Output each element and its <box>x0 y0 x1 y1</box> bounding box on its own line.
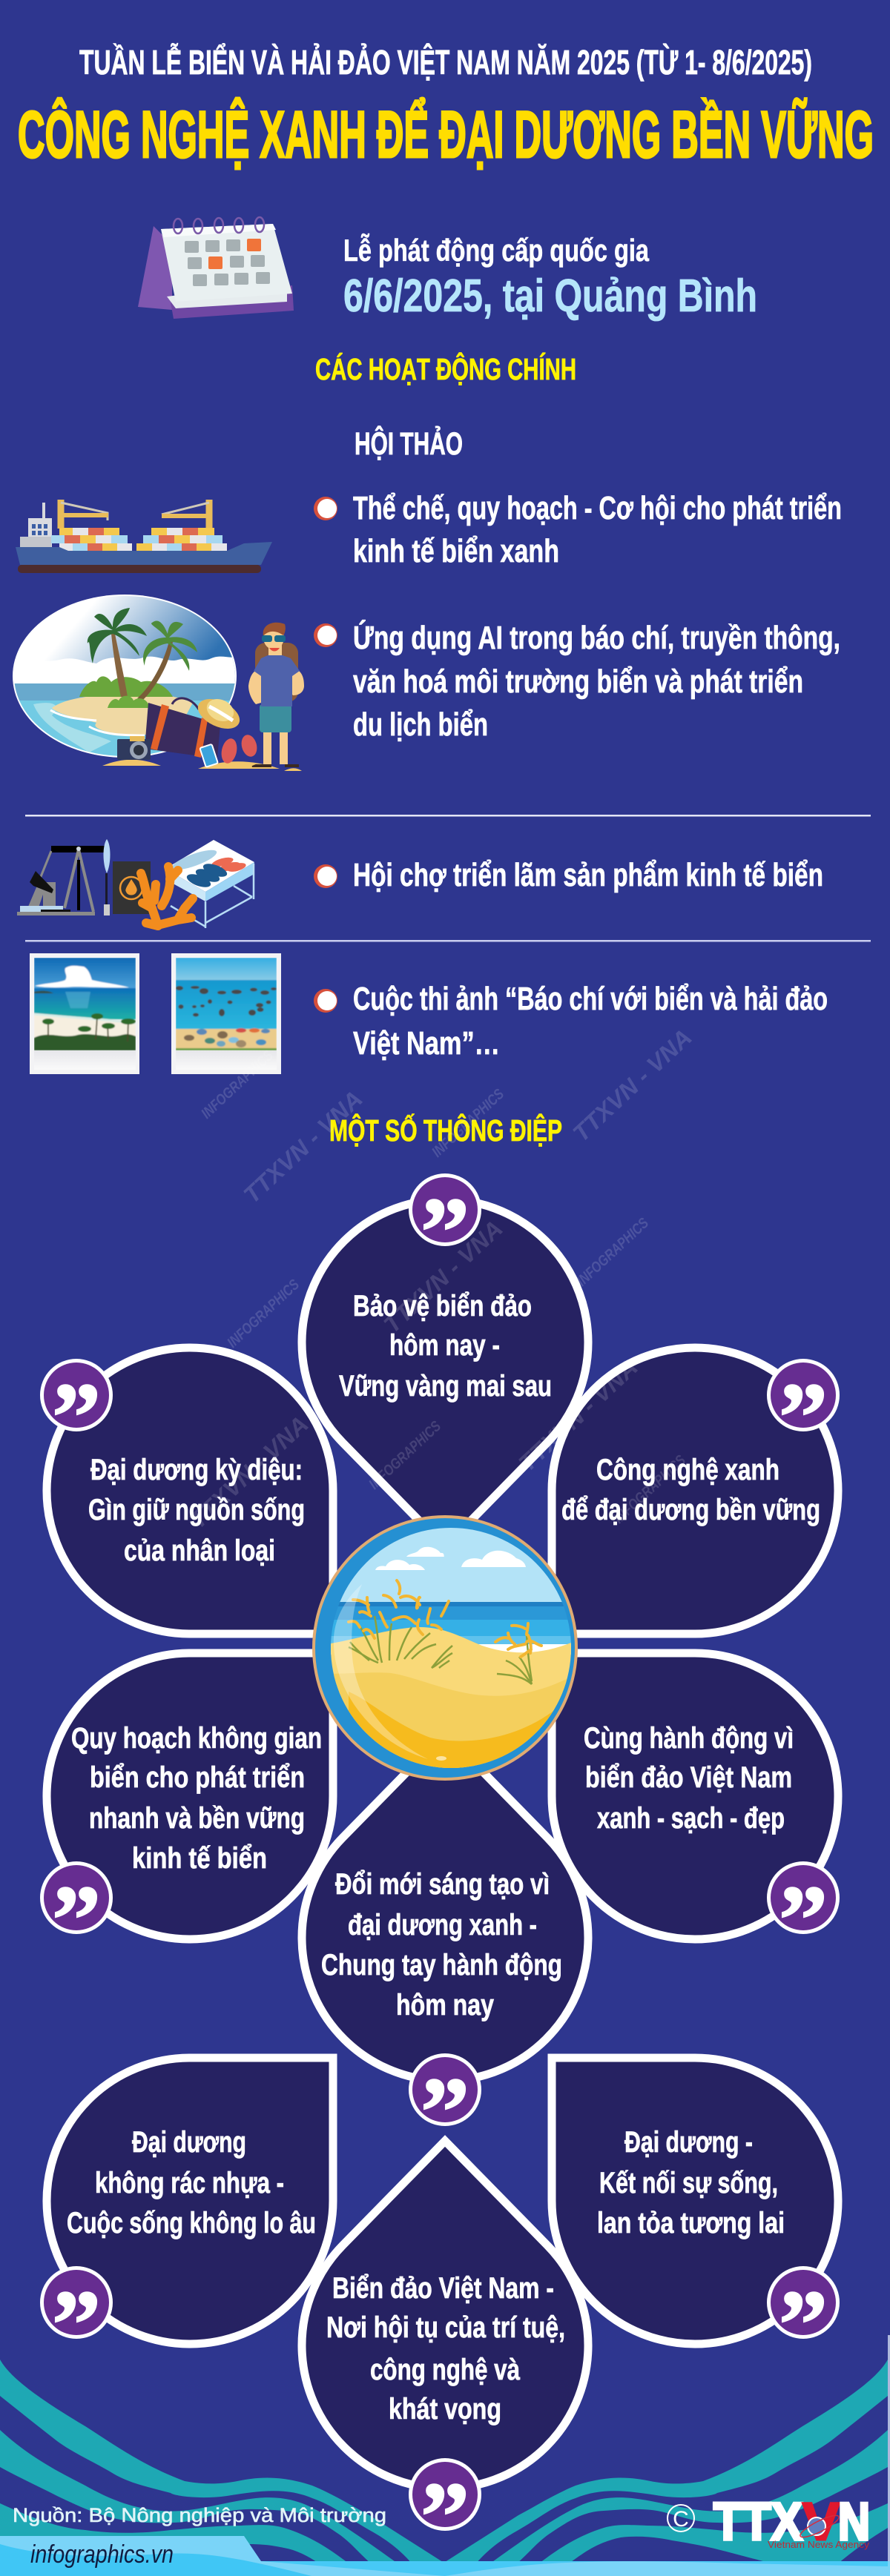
watermarks: INFOGRAPHICS <box>429 1086 507 1161</box>
petal: lower right: Đại dương - <box>624 2126 753 2159</box>
teardrop: top <box>302 1199 588 1547</box>
icon: island and traveller <box>13 595 304 771</box>
petal: middle left: nhanh và bền vững <box>89 1802 305 1835</box>
teardrop: bottom: khát vọng <box>389 2393 501 2426</box>
teardrop: centre <box>302 1733 588 2081</box>
icon: quote bottom: ” <box>421 2462 469 2571</box>
wave bands right <box>443 2360 888 2563</box>
teardrop: centre: Chung tay hành động <box>321 1949 562 1981</box>
petal: upper right <box>552 1348 838 1634</box>
fish stall <box>165 840 254 928</box>
launch label: Lễ phát động cấp quốc gia <box>343 232 649 268</box>
icon: quote middle right <box>767 1861 840 1974</box>
watermarks: INFOGRAPHICS <box>573 1215 652 1290</box>
logo: TTXVN: TTX <box>713 2493 802 2552</box>
petal: lower left <box>47 2058 333 2344</box>
sand mounds <box>102 760 302 771</box>
petal: middle right: biển đảo Việt Nam <box>585 1761 792 1794</box>
icon: quote lower right <box>767 2266 840 2379</box>
icon: quote top: ” <box>421 1177 469 1286</box>
grass stalks <box>349 1580 449 1638</box>
suitcase <box>145 698 220 758</box>
photo: beach <box>30 953 139 1074</box>
text: item 2: du lịch biển <box>353 706 488 743</box>
petal: middle right: xanh - sạch - đẹp <box>597 1802 785 1835</box>
traveller <box>248 623 304 766</box>
petal: upper left <box>47 1348 333 1634</box>
watermarks: INFOGRAPHICS <box>198 1047 277 1122</box>
icon: quote lower right: ” <box>779 2270 828 2379</box>
bullet <box>314 623 337 647</box>
teardrop: centre: hôm nay <box>396 1989 495 2022</box>
sand layers <box>326 1627 571 1772</box>
teardrop: bottom <box>302 2141 588 2489</box>
petal: lower left: Cuộc sống không lo âu <box>67 2207 316 2239</box>
photo: fishing boats <box>171 953 281 1074</box>
teardrop: centre: đại dương xanh - <box>348 1909 537 1941</box>
logo: TTXVN: N <box>838 2493 870 2552</box>
teardrop: top: Bảo vệ biển đảo <box>353 1290 532 1322</box>
petal: middle left: biển cho phát triển <box>90 1761 305 1794</box>
heading: messages: MỘT SỐ THÔNG ĐIỆP <box>329 1113 562 1148</box>
watermarks: TTXVN - VNA <box>378 1215 508 1338</box>
teardrop: top: Vững vàng mai sau <box>339 1370 552 1403</box>
watermarks: TTXVN - VNA <box>184 1411 314 1534</box>
petal: upper right: Công nghệ xanh <box>596 1454 779 1486</box>
icon: quote centre: ” <box>421 2057 469 2166</box>
launch event text <box>343 232 757 322</box>
camera <box>117 736 151 760</box>
bullet <box>314 989 337 1013</box>
flip-flops <box>220 733 260 765</box>
icon: quote lower left: ” <box>52 2270 101 2379</box>
watermarks <box>184 1024 697 1534</box>
petal: lower right: Kết nối sự sống, <box>599 2167 778 2199</box>
text: item 4: Việt Nam”… <box>353 1025 500 1062</box>
logo: TTXVN: V <box>802 2493 840 2552</box>
heading: main activities: CÁC HOẠT ĐỘNG CHÍNH <box>315 352 576 386</box>
illustration: beach lens <box>312 1515 578 1781</box>
petal: middle right <box>552 1653 838 1939</box>
icon: sea economy products <box>17 839 254 928</box>
petal: lower left: không rác nhựa - <box>95 2167 284 2199</box>
teardrop: bottom: Biển đảo Việt Nam - <box>332 2272 554 2305</box>
logo: copyright <box>668 2505 694 2532</box>
watermarks: INFOGRAPHICS <box>224 1277 303 1351</box>
text: item 2 <box>353 619 840 743</box>
teardrop: bottom: công nghệ và <box>370 2354 521 2386</box>
petal: middle left <box>47 1653 333 1939</box>
bottom water strip <box>0 2536 890 2576</box>
petal: upper left: của nhân loại <box>124 1534 275 1567</box>
oil pump <box>17 839 110 915</box>
petal: upper right: để đại dương bền vững <box>561 1494 820 1526</box>
grass clump 2 <box>497 1635 532 1684</box>
icon: quote middle left: ” <box>52 1865 101 1974</box>
watermarks: TTXVN - VNA <box>567 1024 697 1147</box>
watermarks: TTXVN - VNA <box>238 1085 368 1208</box>
coral <box>141 867 193 926</box>
text: item 4 <box>353 981 828 1062</box>
petal: middle left: Quy hoạch không gian <box>71 1722 322 1755</box>
petal: upper left: Đại dương kỳ diệu: <box>90 1454 303 1486</box>
logo: TTXVN: Vietnam News Agency <box>768 2539 870 2550</box>
bottom waves <box>0 2335 890 2576</box>
text: item 1 <box>353 490 842 569</box>
watermarks: TTXVN - VNA <box>513 1354 643 1477</box>
petal: upper left: Gìn giữ nguồn sống <box>88 1494 305 1526</box>
source: Nguồn: Bộ Nông nghiệp và Môi trường <box>13 2504 386 2526</box>
text: item 1: kinh tế biển xanh <box>353 533 559 569</box>
icon: quote upper right: ” <box>779 1363 828 1471</box>
subheading: workshops: HỘI THẢO <box>355 426 463 462</box>
wave bands left <box>0 2360 445 2563</box>
icon: quote centre <box>409 2053 481 2166</box>
icon: quote upper left: ” <box>52 1363 101 1471</box>
icon: quote bottom <box>409 2458 481 2571</box>
bullet <box>314 497 337 520</box>
icon: calendar <box>138 217 294 319</box>
watermarks: INFOGRAPHICS <box>366 1418 444 1493</box>
logo: copyright: C <box>673 2507 689 2532</box>
oil barrel <box>113 861 151 914</box>
petal: lower right: lan tỏa tương lai <box>597 2207 785 2239</box>
teardrop: bottom: Nơi hội tụ của trí tuệ, <box>326 2311 565 2344</box>
logo: TTXVN <box>713 2493 870 2552</box>
petal: middle right: Cùng hành động vì <box>584 1722 794 1755</box>
teardrop: top: hôm nay - <box>389 1329 500 1362</box>
grass clump 1 <box>349 1616 452 1668</box>
watermarks: INFOGRAPHICS <box>610 1452 689 1527</box>
icon: quote lower left <box>40 2266 113 2379</box>
petal: lower left: Đại dương <box>132 2126 246 2159</box>
icon: quote top <box>409 1173 481 1286</box>
glass highlight <box>334 1584 428 1759</box>
icon: quote upper left <box>40 1359 113 1471</box>
clouds <box>375 1547 526 1570</box>
palm trees <box>88 608 197 700</box>
phone <box>200 744 218 767</box>
website: infographics.vn <box>30 2540 174 2569</box>
petal: middle left: kinh tế biển <box>132 1842 267 1875</box>
icon: quote upper right <box>767 1359 840 1471</box>
bullet <box>314 864 337 888</box>
teardrop: centre: Đổi mới sáng tạo vì <box>335 1868 550 1901</box>
launch date and place: 6/6/2025, tại Quảng Bình <box>343 271 757 322</box>
hat <box>194 693 244 735</box>
petal: lower right <box>552 2058 838 2344</box>
title <box>18 43 874 171</box>
island scene <box>13 595 237 760</box>
icon: quote middle right: ” <box>779 1865 828 1974</box>
icon: container ship <box>16 500 272 573</box>
icon: quote middle left <box>40 1861 113 1974</box>
